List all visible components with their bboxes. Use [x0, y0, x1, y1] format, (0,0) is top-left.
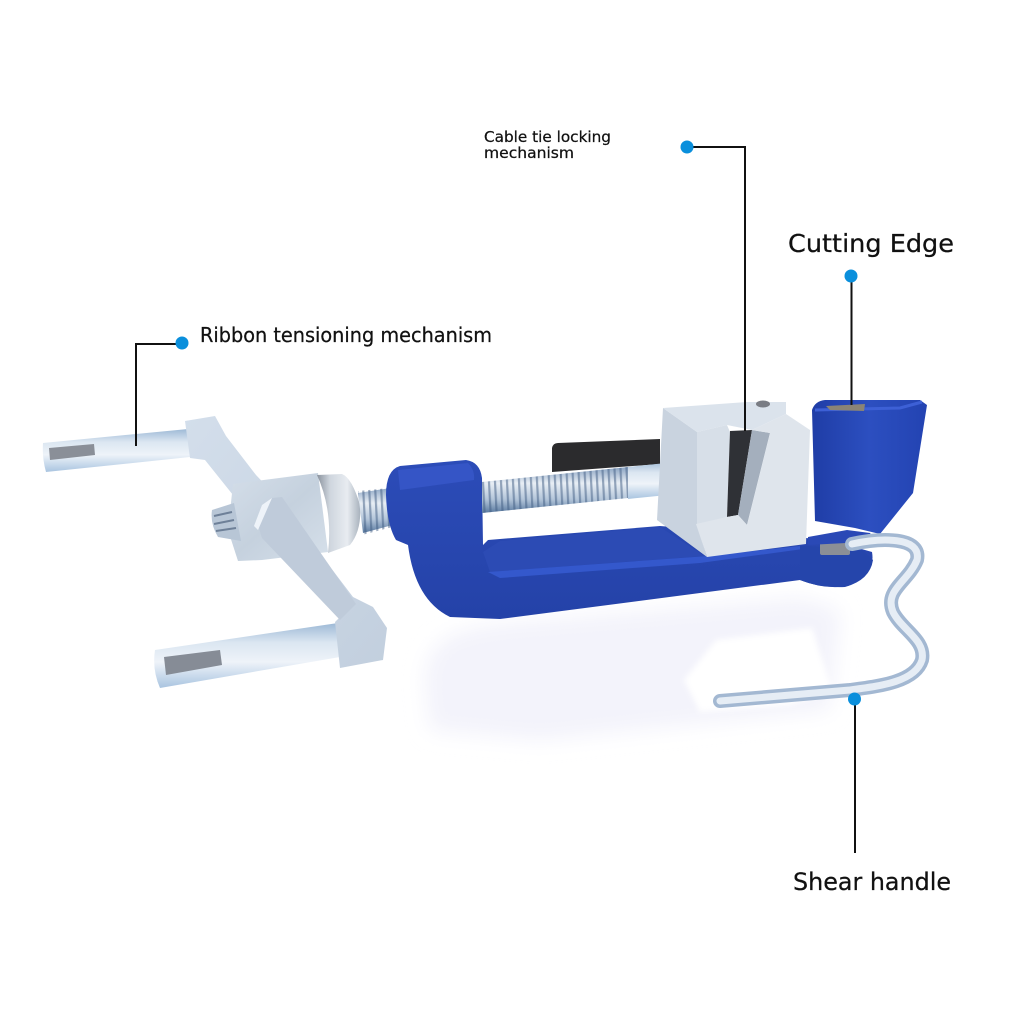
blue C frame — [386, 460, 873, 619]
cutter hole — [826, 404, 865, 411]
main screw — [482, 461, 688, 513]
cutting edge label: Cutting Edge — [788, 229, 954, 258]
table reflection of the tool — [425, 598, 840, 740]
cutter top rim highlights — [815, 402, 922, 410]
lower grip — [154, 623, 340, 688]
ribbon label: Ribbon tensioning mechanism — [200, 323, 492, 347]
crank hub — [228, 473, 328, 561]
cutting edge dot — [844, 270, 858, 282]
bolt end — [212, 503, 241, 541]
callout label: mechanism — [484, 144, 574, 162]
top surface — [663, 402, 786, 432]
shear handle label: Shear handle — [793, 868, 951, 896]
lower lip — [808, 530, 873, 545]
slot side — [738, 430, 770, 525]
inner bar face — [483, 527, 705, 572]
eye end — [800, 546, 873, 587]
callout: cutting edge — [788, 229, 954, 405]
tool: cable tie tensioning tool — [43, 400, 927, 701]
washer — [317, 474, 360, 553]
callout dot — [680, 140, 694, 154]
ribbon dot — [176, 336, 188, 350]
black pad behind block — [552, 439, 660, 472]
crank arm — [185, 416, 387, 668]
frame body — [386, 460, 872, 619]
callout: ribbon tensioning mechanism — [136, 323, 492, 446]
pivot pin — [820, 541, 850, 555]
upper grip — [43, 429, 190, 472]
front left wall — [697, 425, 730, 525]
right front face — [696, 414, 810, 557]
blue cutter — [808, 400, 927, 545]
shear handle dot — [848, 692, 861, 706]
set screw — [756, 400, 770, 408]
left face — [657, 408, 707, 557]
callout: cable tie locking mechanism — [484, 128, 745, 431]
wire shear handle — [720, 540, 922, 701]
hub rib highlight — [258, 497, 356, 620]
silver crank handle — [43, 416, 400, 688]
head highlight — [398, 463, 474, 490]
slot — [727, 430, 752, 517]
bar front highlight — [488, 546, 803, 578]
short thread — [358, 487, 400, 535]
callout: shear handle — [793, 692, 951, 896]
silver locking block — [657, 400, 810, 557]
callout label: Cable tie locking — [484, 128, 611, 146]
